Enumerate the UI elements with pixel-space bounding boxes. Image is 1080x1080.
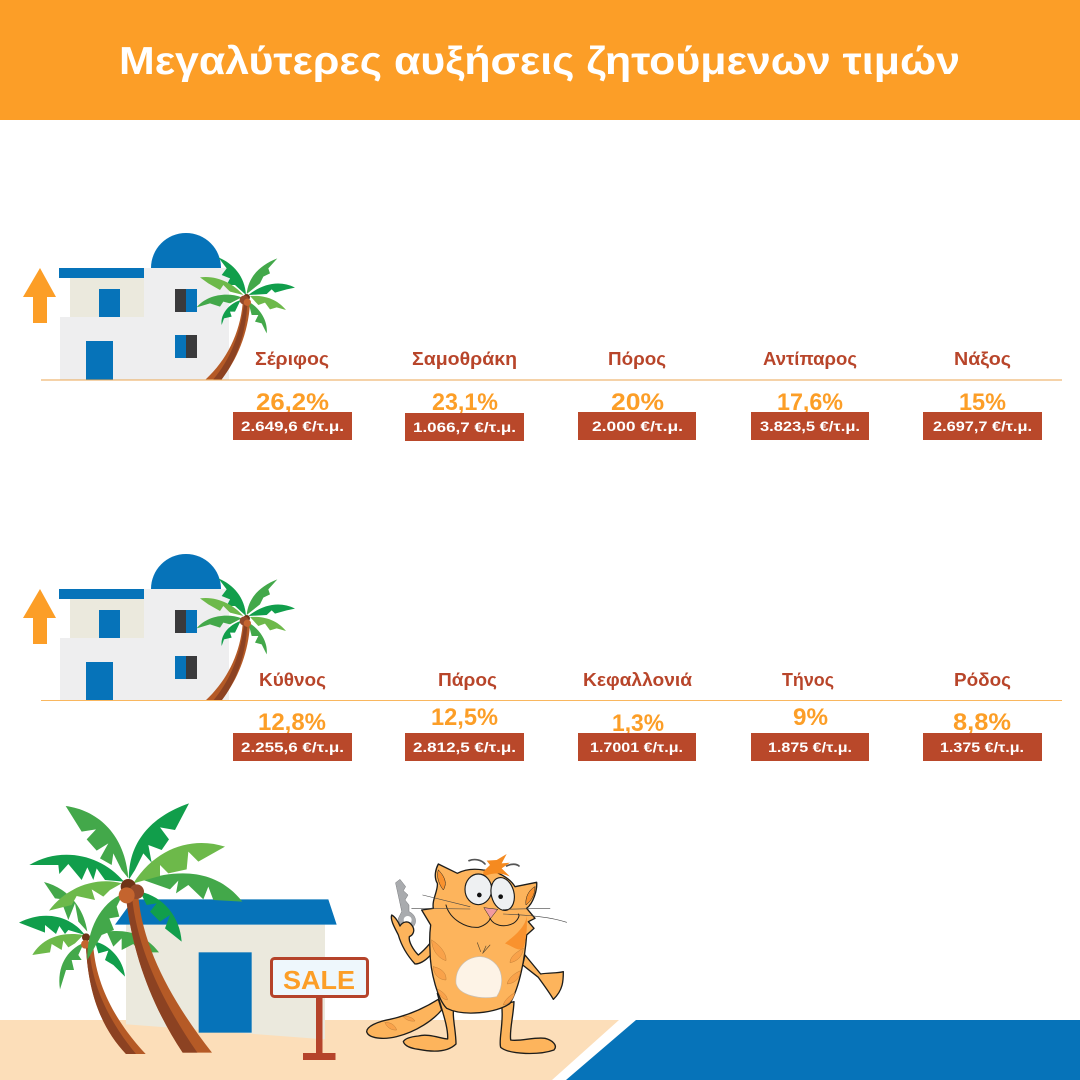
column: Αντίπαρος: Αντίπαρος	[763, 349, 857, 369]
column: Σαμοθράκη	[405, 349, 524, 441]
column: Κύθνος: 2.255,6 €/τ.μ.	[241, 739, 344, 755]
icon: house with palm and up arrow	[23, 554, 295, 701]
column: Τήνος	[751, 670, 869, 761]
column: Σέριφος: 2.649,6 €/τ.μ.	[241, 418, 344, 434]
column: Αντίπαρος	[751, 349, 869, 440]
column: Αντίπαρος: 3.823,5 €/τ.μ.	[760, 418, 860, 434]
column: Νάξος: Νάξος	[954, 349, 1011, 370]
column: Σαμοθράκη: 23,1%	[432, 389, 498, 416]
illustration: orange cat holding a key	[367, 854, 567, 1053]
column: Τήνος: 1.875 €/τ.μ.	[768, 739, 852, 755]
panel: top row	[23, 233, 1062, 441]
column: Πόρος: Πόρος	[608, 349, 666, 369]
column: Κεφαλλονιά: 1.7001 €/τ.μ.	[590, 739, 683, 755]
column: Σαμοθράκη: Σαμοθράκη	[412, 349, 517, 369]
large palm	[29, 803, 242, 1053]
sale sign: SALE	[283, 967, 355, 995]
column: Ρόδος	[923, 670, 1042, 761]
column: Πόρος	[578, 349, 696, 440]
sea	[566, 1020, 1080, 1080]
title: Μεγαλύτερες αυξήσεις ζητούμενων τιμών	[119, 40, 960, 83]
sale sign	[272, 958, 368, 1060]
column: Ρόδος: 1.375 €/τ.μ.	[940, 739, 1024, 755]
column: Νάξος	[923, 349, 1042, 440]
column: Κεφαλλονιά: 1,3%	[612, 710, 664, 737]
column: Αντίπαρος: 17,6%	[777, 389, 843, 416]
column: Κύθνος: 12,8%	[258, 709, 326, 736]
column: Νάξος: 2.697,7 €/τ.μ.	[933, 418, 1032, 434]
column: Πόρος: 20%	[611, 389, 664, 416]
sand	[0, 1020, 619, 1080]
panel: bottom row	[23, 554, 1062, 761]
column: Κύθνος	[233, 670, 352, 761]
column: Πόρος: 2.000 €/τ.μ.	[592, 418, 683, 434]
column: Κεφαλλονιά: Κεφαλλονιά	[583, 670, 692, 690]
column: Κεφαλλονιά	[578, 670, 696, 761]
column: Πάρος	[405, 670, 524, 761]
column: Σαμοθράκη: 1.066,7 €/τ.μ.	[413, 419, 516, 435]
icon: house with palm and up arrow	[23, 233, 295, 380]
column: Ρόδος: 8,8%	[953, 709, 1011, 736]
small palm	[19, 882, 159, 1054]
column: Τήνος: Τήνος	[782, 670, 834, 690]
column: Κύθνος: Κύθνος	[259, 670, 326, 690]
column: Σέριφος: 26,2%	[256, 389, 329, 416]
column: Νάξος: 15%	[959, 389, 1006, 416]
header band	[0, 0, 1080, 120]
column: Τήνος: 9%	[793, 704, 828, 731]
column: Σέριφος: Σέριφος	[255, 349, 329, 369]
illustration: beach house with palms	[19, 803, 337, 1054]
column: Πάρος: 2.812,5 €/τ.μ.	[413, 739, 516, 755]
column: Σέριφος	[233, 349, 352, 440]
column: Πάρος: Πάρος	[438, 670, 497, 690]
column: Ρόδος: Ρόδος	[954, 670, 1011, 690]
column: Πάρος: 12,5%	[431, 704, 498, 731]
